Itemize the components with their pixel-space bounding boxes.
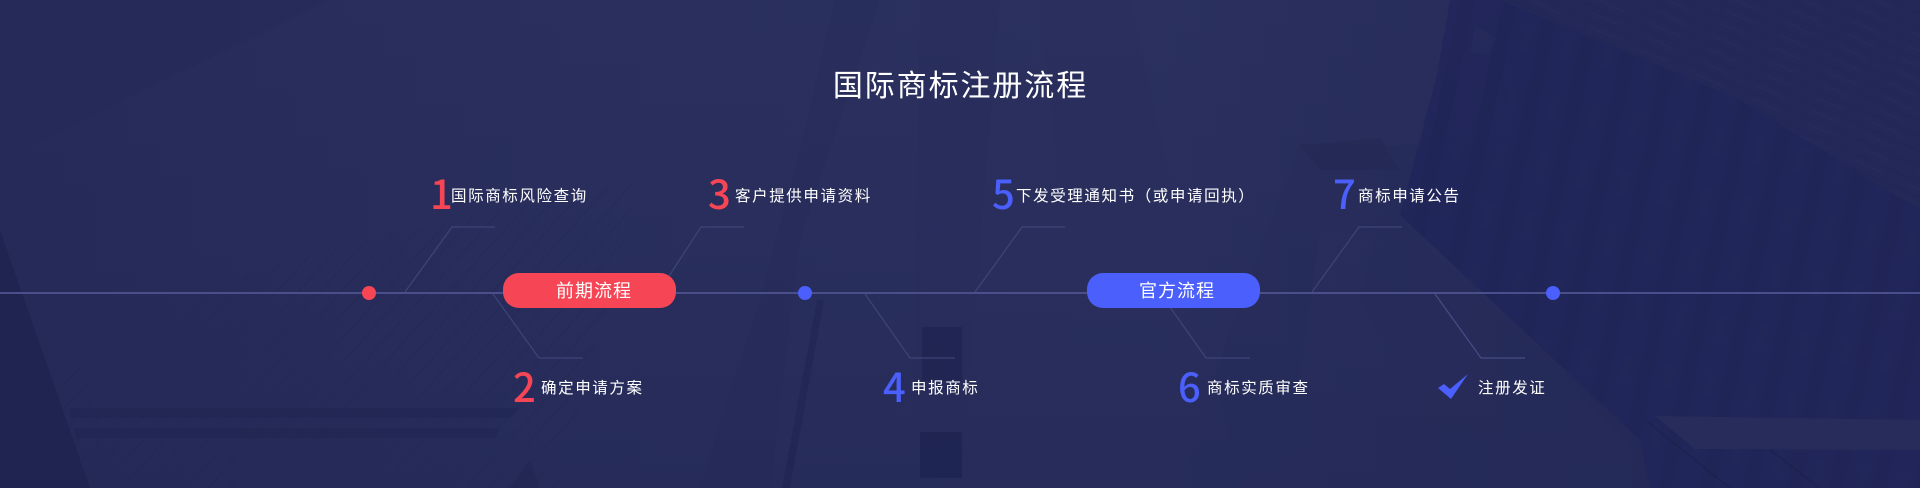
connector: step 7 (1312, 227, 1402, 292)
step number 7: 7 (1333, 163, 1356, 221)
step number 5: 5 (992, 163, 1015, 221)
pill: official process (1087, 273, 1260, 308)
step text 4: 申报商标 (911, 376, 979, 398)
step number 6: 6 (1178, 356, 1201, 414)
node: mid (blue) (798, 286, 812, 300)
step: registration certificate text: 注册发证 (1478, 376, 1546, 398)
step text 6: 商标实质审查 (1207, 376, 1310, 398)
icon: check mark (1438, 374, 1468, 399)
step text 1: 国际商标风险查询 (451, 184, 588, 206)
step 2 (513, 356, 644, 414)
node: start (red) (362, 286, 376, 300)
pill: pre-phase process: 前期流程 (556, 277, 632, 303)
step text 7: 商标申请公告 (1358, 184, 1461, 206)
connector: step 6 (1165, 300, 1250, 358)
step number 1: 1 (430, 163, 453, 221)
connector: step 5 (975, 227, 1065, 292)
connector: step 2 (493, 294, 583, 358)
connector: step 4 (865, 294, 955, 358)
pill: official process: 官方流程 (1139, 277, 1215, 303)
title: 国际商标注册流程 (833, 61, 1088, 105)
step number 3: 3 (708, 163, 731, 221)
step 4 (883, 356, 979, 414)
step text 5: 下发受理通知书（或申请回执） (1016, 184, 1255, 206)
connector: step 3 (660, 227, 744, 290)
step 7 (1333, 163, 1461, 221)
connector: step 1 (405, 227, 495, 292)
step number 4: 4 (883, 356, 906, 414)
step 5 (992, 163, 1255, 221)
step 3 (708, 163, 872, 221)
pill: pre-phase process (503, 273, 676, 308)
step 6 (1178, 356, 1310, 414)
step number 2: 2 (513, 356, 536, 414)
timeline axis (0, 292, 1920, 294)
step 1 (430, 163, 588, 221)
step text 2: 确定申请方案 (541, 376, 644, 398)
connector: registration (1435, 294, 1525, 358)
node: end (blue) (1546, 286, 1560, 300)
step text 3: 客户提供申请资料 (735, 184, 872, 206)
